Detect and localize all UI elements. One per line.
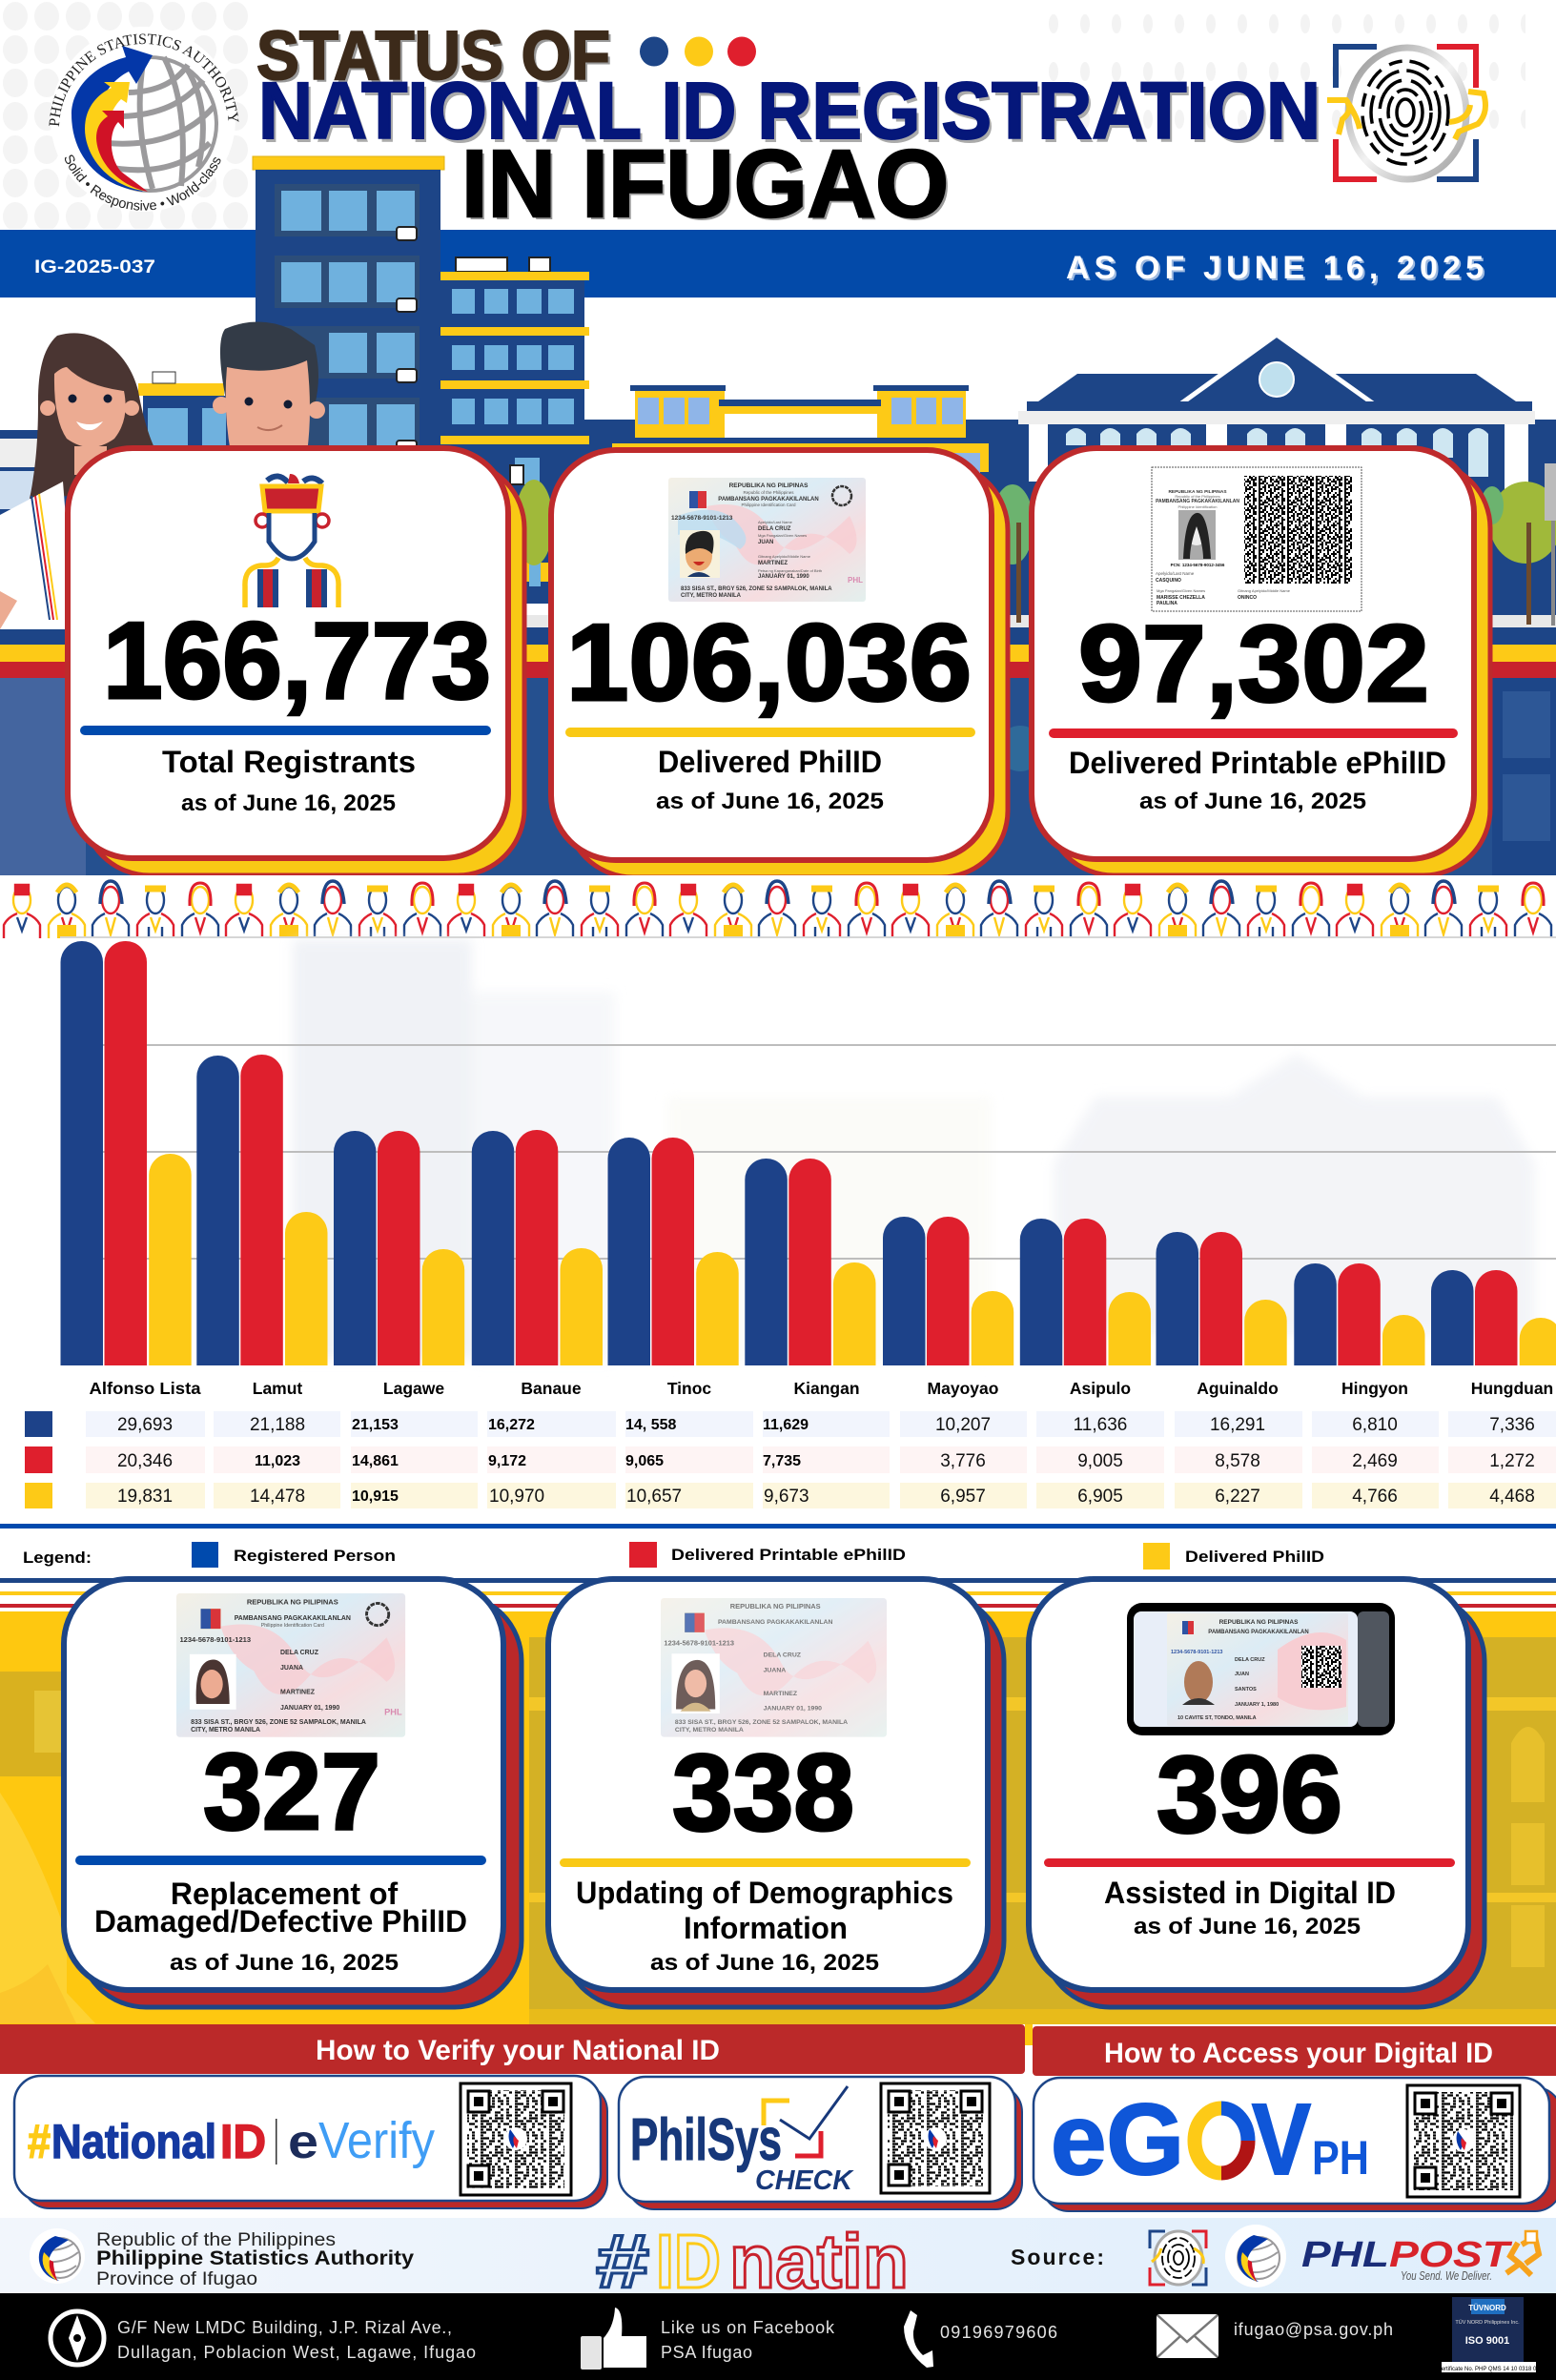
panel: assisted in digital id bbox=[1029, 1579, 1484, 2007]
illustration: philid card: CITY, METRO MANILA bbox=[681, 593, 742, 599]
hashtag idnatin: ID bbox=[656, 2219, 721, 2304]
value: 106,036: 106,036 bbox=[566, 603, 972, 724]
halftone dots left bbox=[0, 0, 252, 229]
organisation name bbox=[96, 2230, 414, 2289]
illustration: printable ephilid: ONINCO bbox=[1238, 595, 1257, 601]
table row: registered person bbox=[25, 1411, 1556, 1437]
table row: delivered philid: 19,831 bbox=[117, 1487, 173, 1507]
label: as of date: as of June 16, 2025 bbox=[656, 789, 884, 814]
divider blue bbox=[80, 726, 491, 735]
yellow services background bbox=[0, 1578, 1556, 2024]
value: 396: 396 bbox=[1157, 1734, 1342, 1856]
table row: delivered printable ephilid: 2,469 bbox=[1352, 1451, 1398, 1471]
table row: delivered philid: 6,227 bbox=[1215, 1487, 1260, 1507]
panel: delivered printable ephilid bbox=[1032, 448, 1490, 875]
table row: delivered printable ephilid: 1,272 bbox=[1489, 1451, 1535, 1471]
logo: phlpost: PHL bbox=[1301, 2235, 1389, 2275]
illustration: phone with digital id: PAMBANSANG PAGKAKAKILANLAN bbox=[1208, 1630, 1309, 1635]
label: damaged defective philid: Damaged/Defective PhilID bbox=[94, 1904, 467, 1939]
legend: Delivered PhilID bbox=[1185, 1548, 1324, 1566]
panel: philsys check bbox=[619, 2077, 1022, 2209]
table header: municipalities bbox=[90, 1379, 1553, 1398]
table header: municipalities: Banaue bbox=[521, 1379, 582, 1398]
icon: thumbs up bbox=[581, 2308, 646, 2370]
table row: delivered philid: 10,657 bbox=[626, 1487, 682, 1507]
illustration: philid card: Philippine Identification Card bbox=[741, 503, 796, 507]
table row: delivered philid: 10,970 bbox=[489, 1487, 544, 1507]
panel: delivered philid bbox=[551, 450, 1008, 877]
illustration: phone with digital id: JANUARY 1, 1980 bbox=[1235, 1702, 1279, 1708]
illustration: printable ephilid: Gitnang Apelyido/Middle Name bbox=[1238, 588, 1291, 593]
table header: municipalities: Mayoyao bbox=[928, 1379, 998, 1398]
table header: municipalities: Asipulo bbox=[1070, 1379, 1131, 1398]
logo: philsys check bbox=[630, 2086, 854, 2196]
title: status of: STATUS OF bbox=[256, 18, 610, 94]
address: G/F New LMDC Building, J.P. Rizal Ave., bbox=[117, 2318, 452, 2337]
illustration: philid card: JUAN bbox=[758, 540, 773, 545]
illustration: philid card: JANUARY 01, 1990 bbox=[758, 574, 809, 580]
table row: registered person: 16,272 bbox=[488, 1417, 535, 1433]
qr code: everify bbox=[461, 2083, 571, 2195]
logo: phlpost: You Send. We Deliver. bbox=[1401, 2268, 1492, 2283]
table row: registered person: 11,629 bbox=[763, 1417, 809, 1433]
facebook: PSA Ifugao bbox=[661, 2343, 752, 2362]
table row: delivered printable ephilid: 7,735 bbox=[763, 1453, 801, 1469]
logo: #nationalid: # bbox=[28, 2115, 51, 2168]
as of date: AS OF JUNE 16, 2025 bbox=[1068, 252, 1485, 288]
badge: iso certification: Certificate No. PHP QMS 14 10 0318 06 bbox=[1437, 2367, 1540, 2372]
illustration: phone with digital id: 10 CAVITE ST, TONDO, MANILA bbox=[1177, 1715, 1257, 1721]
divider yellow bbox=[560, 1858, 971, 1867]
logo: #nationalid: National bbox=[51, 2115, 216, 2168]
bars: Hungduan bbox=[1431, 1270, 1556, 1365]
bar chart: municipalities bbox=[60, 937, 1556, 1392]
hashtag idnatin bbox=[596, 2219, 909, 2304]
logo: philippine statistics authority: PHILIPPINE STATISTICS AUTHORITY bbox=[49, 34, 238, 127]
bars: Hingyon bbox=[1294, 1263, 1424, 1365]
title: in ifugao: IN IFUGAO bbox=[461, 131, 949, 237]
heading banner: how to access: How to Access your Digital ID bbox=[1104, 2038, 1493, 2069]
facebook bbox=[661, 2318, 835, 2362]
illustration: philid card: 833 SISA ST., BRGY 526, ZONE 52 SAMPALOK, MANILA bbox=[681, 586, 832, 592]
illustration: philid card female: PAMBANSANG PAGKAKAKILANLAN bbox=[235, 1615, 351, 1622]
email: ifugao@psa.gov.ph bbox=[1234, 2320, 1393, 2339]
logo: philsys check: CHECK bbox=[755, 2165, 854, 2196]
illustration: tall blue building bbox=[253, 156, 444, 456]
icon: phone bbox=[904, 2310, 933, 2368]
illustration: philid card faded: CITY, METRO MANILA bbox=[675, 1727, 744, 1734]
table row: registered person: 10,207 bbox=[935, 1415, 991, 1435]
table row: delivered philid: 4,766 bbox=[1352, 1487, 1398, 1507]
source label: Source: bbox=[1011, 2245, 1104, 2269]
illustration: printable ephilid bbox=[1152, 467, 1362, 611]
table row: delivered philid: 6,905 bbox=[1077, 1487, 1123, 1507]
table row: registered person: 11,636 bbox=[1074, 1415, 1127, 1435]
illustration: philid card: Mga Pangalan/Given Names bbox=[758, 533, 807, 538]
table row: delivered philid: 4,468 bbox=[1489, 1487, 1535, 1507]
table row: delivered printable ephilid: 9,065 bbox=[625, 1453, 664, 1469]
address bbox=[117, 2318, 476, 2362]
table header: municipalities: Lagawe bbox=[383, 1379, 444, 1398]
heading banner: how to verify bbox=[0, 2024, 1025, 2074]
bars: Lagawe bbox=[334, 1131, 465, 1365]
divider red bbox=[1049, 728, 1458, 738]
table header: municipalities: Hungduan bbox=[1471, 1379, 1553, 1398]
bars: Lamut bbox=[196, 1055, 328, 1392]
table row: delivered philid: 14,478 bbox=[250, 1487, 305, 1507]
table row: delivered printable ephilid: 14,861 bbox=[352, 1453, 399, 1469]
illustration: municipal hall bbox=[1018, 335, 1535, 610]
table header: municipalities: Lamut bbox=[253, 1379, 302, 1398]
badge: iso certification: TÜV NORD Philippines Inc. bbox=[1455, 2319, 1520, 2326]
illustration: printable ephilid: Philippine Identification bbox=[1178, 504, 1217, 509]
value: 327: 327 bbox=[203, 1732, 380, 1853]
title: status of: STATUS OF bbox=[259, 21, 613, 97]
section divider blue bbox=[0, 1524, 1556, 1529]
illustration: philid card female: PHL bbox=[384, 1708, 402, 1717]
decorative three dots bbox=[640, 36, 756, 67]
label: updating of demographics: Updating of Demographics bbox=[576, 1876, 953, 1910]
illustration: philid card: DELA CRUZ bbox=[758, 526, 791, 532]
illustration: philid card female: JANUARY 01, 1990 bbox=[280, 1705, 339, 1712]
table row: delivered printable ephilid: 11,023 bbox=[255, 1453, 300, 1469]
table header: municipalities: Tinoc bbox=[667, 1379, 711, 1398]
illustration: phone with digital id: SANTOS bbox=[1235, 1687, 1257, 1693]
illustration: philid card faded: JANUARY 01, 1990 bbox=[764, 1706, 822, 1713]
bars: Mayoyao bbox=[883, 1217, 1014, 1365]
illustration: low yellow building bbox=[607, 385, 993, 482]
title: in ifugao: IN IFUGAO bbox=[464, 133, 952, 240]
label: as of date: as of June 16, 2025 bbox=[1134, 1914, 1361, 1939]
divider blue bbox=[75, 1856, 486, 1865]
icon: ifugao person bbox=[245, 474, 338, 607]
illustration: philid card female: Philippine Identification Card bbox=[261, 1623, 324, 1629]
table row: delivered philid bbox=[25, 1483, 1556, 1508]
table row: delivered philid: 9,673 bbox=[764, 1487, 809, 1507]
logo: phlpost bbox=[1301, 2231, 1539, 2283]
bars: Kiangan bbox=[745, 1159, 875, 1365]
illustration: philid card female: 1234-5678-9101-1213 bbox=[179, 1635, 251, 1644]
illustration: printable ephilid: Apelyido/Last Name bbox=[1156, 571, 1195, 576]
logo: philsys check: PhilSys bbox=[630, 2107, 782, 2173]
table header: municipalities: Alfonso Lista bbox=[90, 1379, 201, 1398]
illustration: street backdrop bbox=[0, 401, 1556, 875]
table row: registered person: 6,810 bbox=[1352, 1415, 1398, 1435]
logo: egov: eG bbox=[1051, 2083, 1184, 2196]
logo: psa small bbox=[30, 2228, 85, 2284]
value: 97,302: 97,302 bbox=[1078, 604, 1429, 725]
illustration: philid card female: MARTINEZ bbox=[280, 1690, 316, 1696]
legend: Delivered Printable ePhilID bbox=[671, 1546, 906, 1564]
illustration: phone with digital id: REPUBLIKA NG PILIPINAS bbox=[1219, 1619, 1299, 1626]
bars: Alfonso Lista bbox=[61, 941, 192, 1392]
logo: philippine statistics authority bbox=[49, 27, 238, 212]
illustration: printable ephilid: PAMBANSANG PAGKAKAKILANLAN bbox=[1156, 499, 1239, 504]
label: as of date: as of June 16, 2025 bbox=[650, 1950, 879, 1976]
label: replacement of: Replacement of bbox=[171, 1877, 398, 1911]
table row: registered person: 21,153 bbox=[352, 1417, 399, 1433]
label: as of date: as of June 16, 2025 bbox=[181, 790, 396, 816]
illustration: printable ephilid: CASQUINO bbox=[1156, 578, 1181, 584]
legend: Legend: bbox=[23, 1549, 92, 1567]
logo: everify: Verify bbox=[318, 2112, 435, 2169]
report code: IG-2025-037 bbox=[34, 257, 155, 277]
title: national id registration: NATIONAL ID REGISTRATION bbox=[261, 70, 1323, 159]
illustration: philid card: Gitnang Apelyido/Middle Name bbox=[758, 554, 811, 559]
illustration: row of filipino workers bbox=[0, 875, 1556, 939]
qr code: egov bbox=[1407, 2085, 1520, 2197]
table row: delivered printable ephilid: 3,776 bbox=[940, 1451, 986, 1471]
label: as of date: as of June 16, 2025 bbox=[170, 1950, 399, 1976]
organisation name: Province of Ifugao bbox=[96, 2269, 257, 2289]
table row: delivered philid: 10,915 bbox=[352, 1488, 399, 1505]
logo: everify: e bbox=[288, 2115, 318, 2168]
illustration: philid card female: 833 SISA ST., BRGY 526, ZONE 52 SAMPALOK, MANILA bbox=[191, 1719, 366, 1726]
label: delivered philid: Delivered PhilID bbox=[658, 745, 882, 779]
illustration: small building behind characters bbox=[138, 372, 229, 453]
table row: registered person: 14, 558 bbox=[625, 1417, 676, 1433]
illustration: philid card: MARTINEZ bbox=[758, 561, 788, 566]
panel: updating of demographics bbox=[548, 1579, 1004, 2007]
illustration: printable ephilid: REPUBLIKA NG PILIPINAS bbox=[1168, 489, 1227, 495]
illustration: philid card faded bbox=[661, 1598, 887, 1737]
illustration: philid card: Republic of the Philippines bbox=[743, 490, 794, 495]
table header: municipalities: Hingyon bbox=[1341, 1379, 1408, 1398]
table row: registered person: 29,693 bbox=[117, 1415, 173, 1435]
agency strip bbox=[0, 2218, 1556, 2304]
legend: Registered Person bbox=[234, 1547, 396, 1565]
table row: delivered printable ephilid: 20,346 bbox=[117, 1451, 173, 1471]
panel: total registrants bbox=[68, 448, 524, 875]
table row: registered person: 21,188 bbox=[250, 1415, 305, 1435]
illustration: phone with digital id bbox=[1127, 1603, 1395, 1735]
logo: egov bbox=[1051, 2083, 1369, 2196]
facebook: Like us on Facebook bbox=[661, 2318, 835, 2337]
table row: registered person: 7,336 bbox=[1489, 1415, 1535, 1435]
table row: delivered printable ephilid: 9,005 bbox=[1077, 1451, 1123, 1471]
logo: psa source bbox=[1225, 2225, 1286, 2288]
illustration: philid card faded: DELA CRUZ bbox=[764, 1652, 801, 1659]
table header: municipalities: Kiangan bbox=[793, 1379, 860, 1398]
badge: iso certification bbox=[1437, 2297, 1540, 2372]
as of date: AS OF JUNE 16, 2025 bbox=[1066, 250, 1484, 286]
icon: compass bbox=[51, 2311, 104, 2365]
illustration: philid card faded: PAMBANSANG PAGKAKAKILANLAN bbox=[718, 1619, 833, 1626]
illustration: printable ephilid: PCN: 1234-5678-9012-3456 bbox=[1171, 563, 1225, 567]
logo: fingerprint small bbox=[1150, 2231, 1206, 2285]
address: Dullagan, Poblacion West, Lagawe, Ifugao bbox=[117, 2343, 476, 2362]
illustration: philid card: Apelyido/Last Name bbox=[758, 520, 793, 524]
illustration: printable ephilid: Republic of the Philippines bbox=[1175, 494, 1220, 499]
footer bbox=[0, 2293, 1556, 2380]
illustration: philid card faded: JUANA bbox=[764, 1667, 786, 1673]
illustration: phone with digital id: DELA CRUZ bbox=[1235, 1657, 1265, 1663]
bars: Asipulo bbox=[1020, 1219, 1151, 1365]
illustration: philid card female: CITY, METRO MANILA bbox=[191, 1727, 260, 1734]
illustration: trees and street lamp bbox=[510, 463, 1556, 626]
divider red bbox=[1044, 1858, 1455, 1867]
data table bbox=[25, 1379, 1556, 1508]
illustration: second blue building bbox=[440, 257, 589, 604]
badge: iso certification: TÜVNORD bbox=[1468, 2304, 1506, 2312]
panel: egov ph bbox=[1034, 2078, 1556, 2211]
chart background ghost buildings bbox=[293, 939, 1535, 1364]
illustration: printable ephilid: MARISSE CHEZELLA bbox=[1157, 595, 1205, 601]
label: delivered printable ephilid: Delivered Printable ePhilID bbox=[1069, 746, 1446, 780]
organisation name: Republic of the Philippines bbox=[96, 2230, 336, 2250]
title: national id registration: NATIONAL ID REGISTRATION bbox=[258, 66, 1321, 155]
illustration: philid card faded: 1234-5678-9101-1213 bbox=[664, 1638, 734, 1647]
qr code: philsys check bbox=[881, 2083, 990, 2193]
panel: replacement of damaged philid bbox=[64, 1579, 522, 2007]
illustration: philid card faded: 833 SISA ST., BRGY 526, ZONE 52 SAMPALOK, MANILA bbox=[675, 1719, 848, 1726]
hashtag idnatin: natin bbox=[729, 2219, 909, 2304]
table header: municipalities: Aguinaldo bbox=[1197, 1379, 1279, 1398]
illustration: philid card female bbox=[176, 1593, 405, 1737]
illustration: philid card female: JUANA bbox=[280, 1665, 303, 1672]
illustration: philid card: Petsa ng Kapanganakan/Date of Birth bbox=[758, 568, 822, 573]
logo: phlpost: POST bbox=[1389, 2235, 1512, 2275]
divider yellow bbox=[565, 728, 975, 737]
character: woman bbox=[0, 333, 160, 629]
logo: egov: PH bbox=[1312, 2131, 1369, 2185]
icon: envelope bbox=[1157, 2314, 1218, 2358]
table row: delivered printable ephilid: 9,172 bbox=[488, 1453, 526, 1469]
illustration: philid card: PAMBANSANG PAGKAKAKILANLAN bbox=[718, 497, 819, 503]
illustration: phone with digital id: JUAN bbox=[1235, 1672, 1249, 1677]
hashtag idnatin: # bbox=[596, 2219, 649, 2304]
illustration: printable ephilid: PAULINA bbox=[1157, 601, 1177, 606]
illustration: philid card: 1234-5678-9101-1213 bbox=[671, 515, 733, 522]
illustration: philid card bbox=[668, 478, 866, 602]
illustration: philid card female: REPUBLIKA NG PILIPINAS bbox=[247, 1598, 338, 1607]
organisation name: Philippine Statistics Authority bbox=[96, 2247, 414, 2269]
illustration: philid card faded: MARTINEZ bbox=[764, 1691, 797, 1697]
illustration: philid card female: DELA CRUZ bbox=[280, 1650, 319, 1656]
panel: national id everify bbox=[14, 2076, 607, 2208]
logo: egov: V bbox=[1252, 2083, 1311, 2196]
banner: blue date band bbox=[0, 230, 1556, 298]
table row: delivered printable ephilid: 8,578 bbox=[1215, 1451, 1260, 1471]
badge: iso certification: ISO 9001 bbox=[1465, 2335, 1509, 2347]
halftone dots right bbox=[1030, 10, 1525, 153]
label: assisted in digital id: Assisted in Digital ID bbox=[1104, 1876, 1396, 1910]
value: 338: 338 bbox=[672, 1733, 854, 1854]
bars: Aguinaldo bbox=[1156, 1232, 1287, 1365]
label: as of date: as of June 16, 2025 bbox=[1139, 789, 1366, 814]
logo: #nationalid: ID bbox=[220, 2115, 266, 2168]
table row: delivered printable ephilid bbox=[25, 1446, 1556, 1473]
phone number: 09196979606 bbox=[940, 2323, 1057, 2342]
table row: registered person: 16,291 bbox=[1210, 1415, 1265, 1435]
heading banner: how to verify: How to Verify your National ID bbox=[316, 2035, 720, 2066]
illustration: philid card: REPUBLIKA NG PILIPINAS bbox=[729, 482, 809, 489]
legend bbox=[23, 1542, 1324, 1570]
illustration: printable ephilid: Mga Pangalan/Given Names bbox=[1157, 588, 1205, 593]
white band under banners bbox=[0, 2076, 1556, 2218]
illustration: phone with digital id: 1234-5678-9101-1213 bbox=[1171, 1650, 1222, 1655]
label: total registrants: Total Registrants bbox=[162, 745, 416, 779]
bars: Banaue bbox=[472, 1130, 603, 1392]
logo: philippine statistics authority: Solid • Responsive • World-class bbox=[65, 154, 221, 211]
label: information: Information bbox=[684, 1911, 848, 1945]
table row: delivered philid: 6,957 bbox=[940, 1487, 986, 1507]
bars: Tinoc bbox=[608, 1138, 739, 1365]
heading banner: how to access bbox=[1025, 2024, 1556, 2076]
illustration: philid card faded: REPUBLIKA NG PILIPINAS bbox=[730, 1602, 821, 1611]
illustration: philid card: PHL bbox=[848, 576, 863, 585]
character: man bbox=[213, 322, 325, 453]
value: 166,773: 166,773 bbox=[103, 601, 491, 722]
icon: fingerprint bbox=[1327, 47, 1485, 179]
